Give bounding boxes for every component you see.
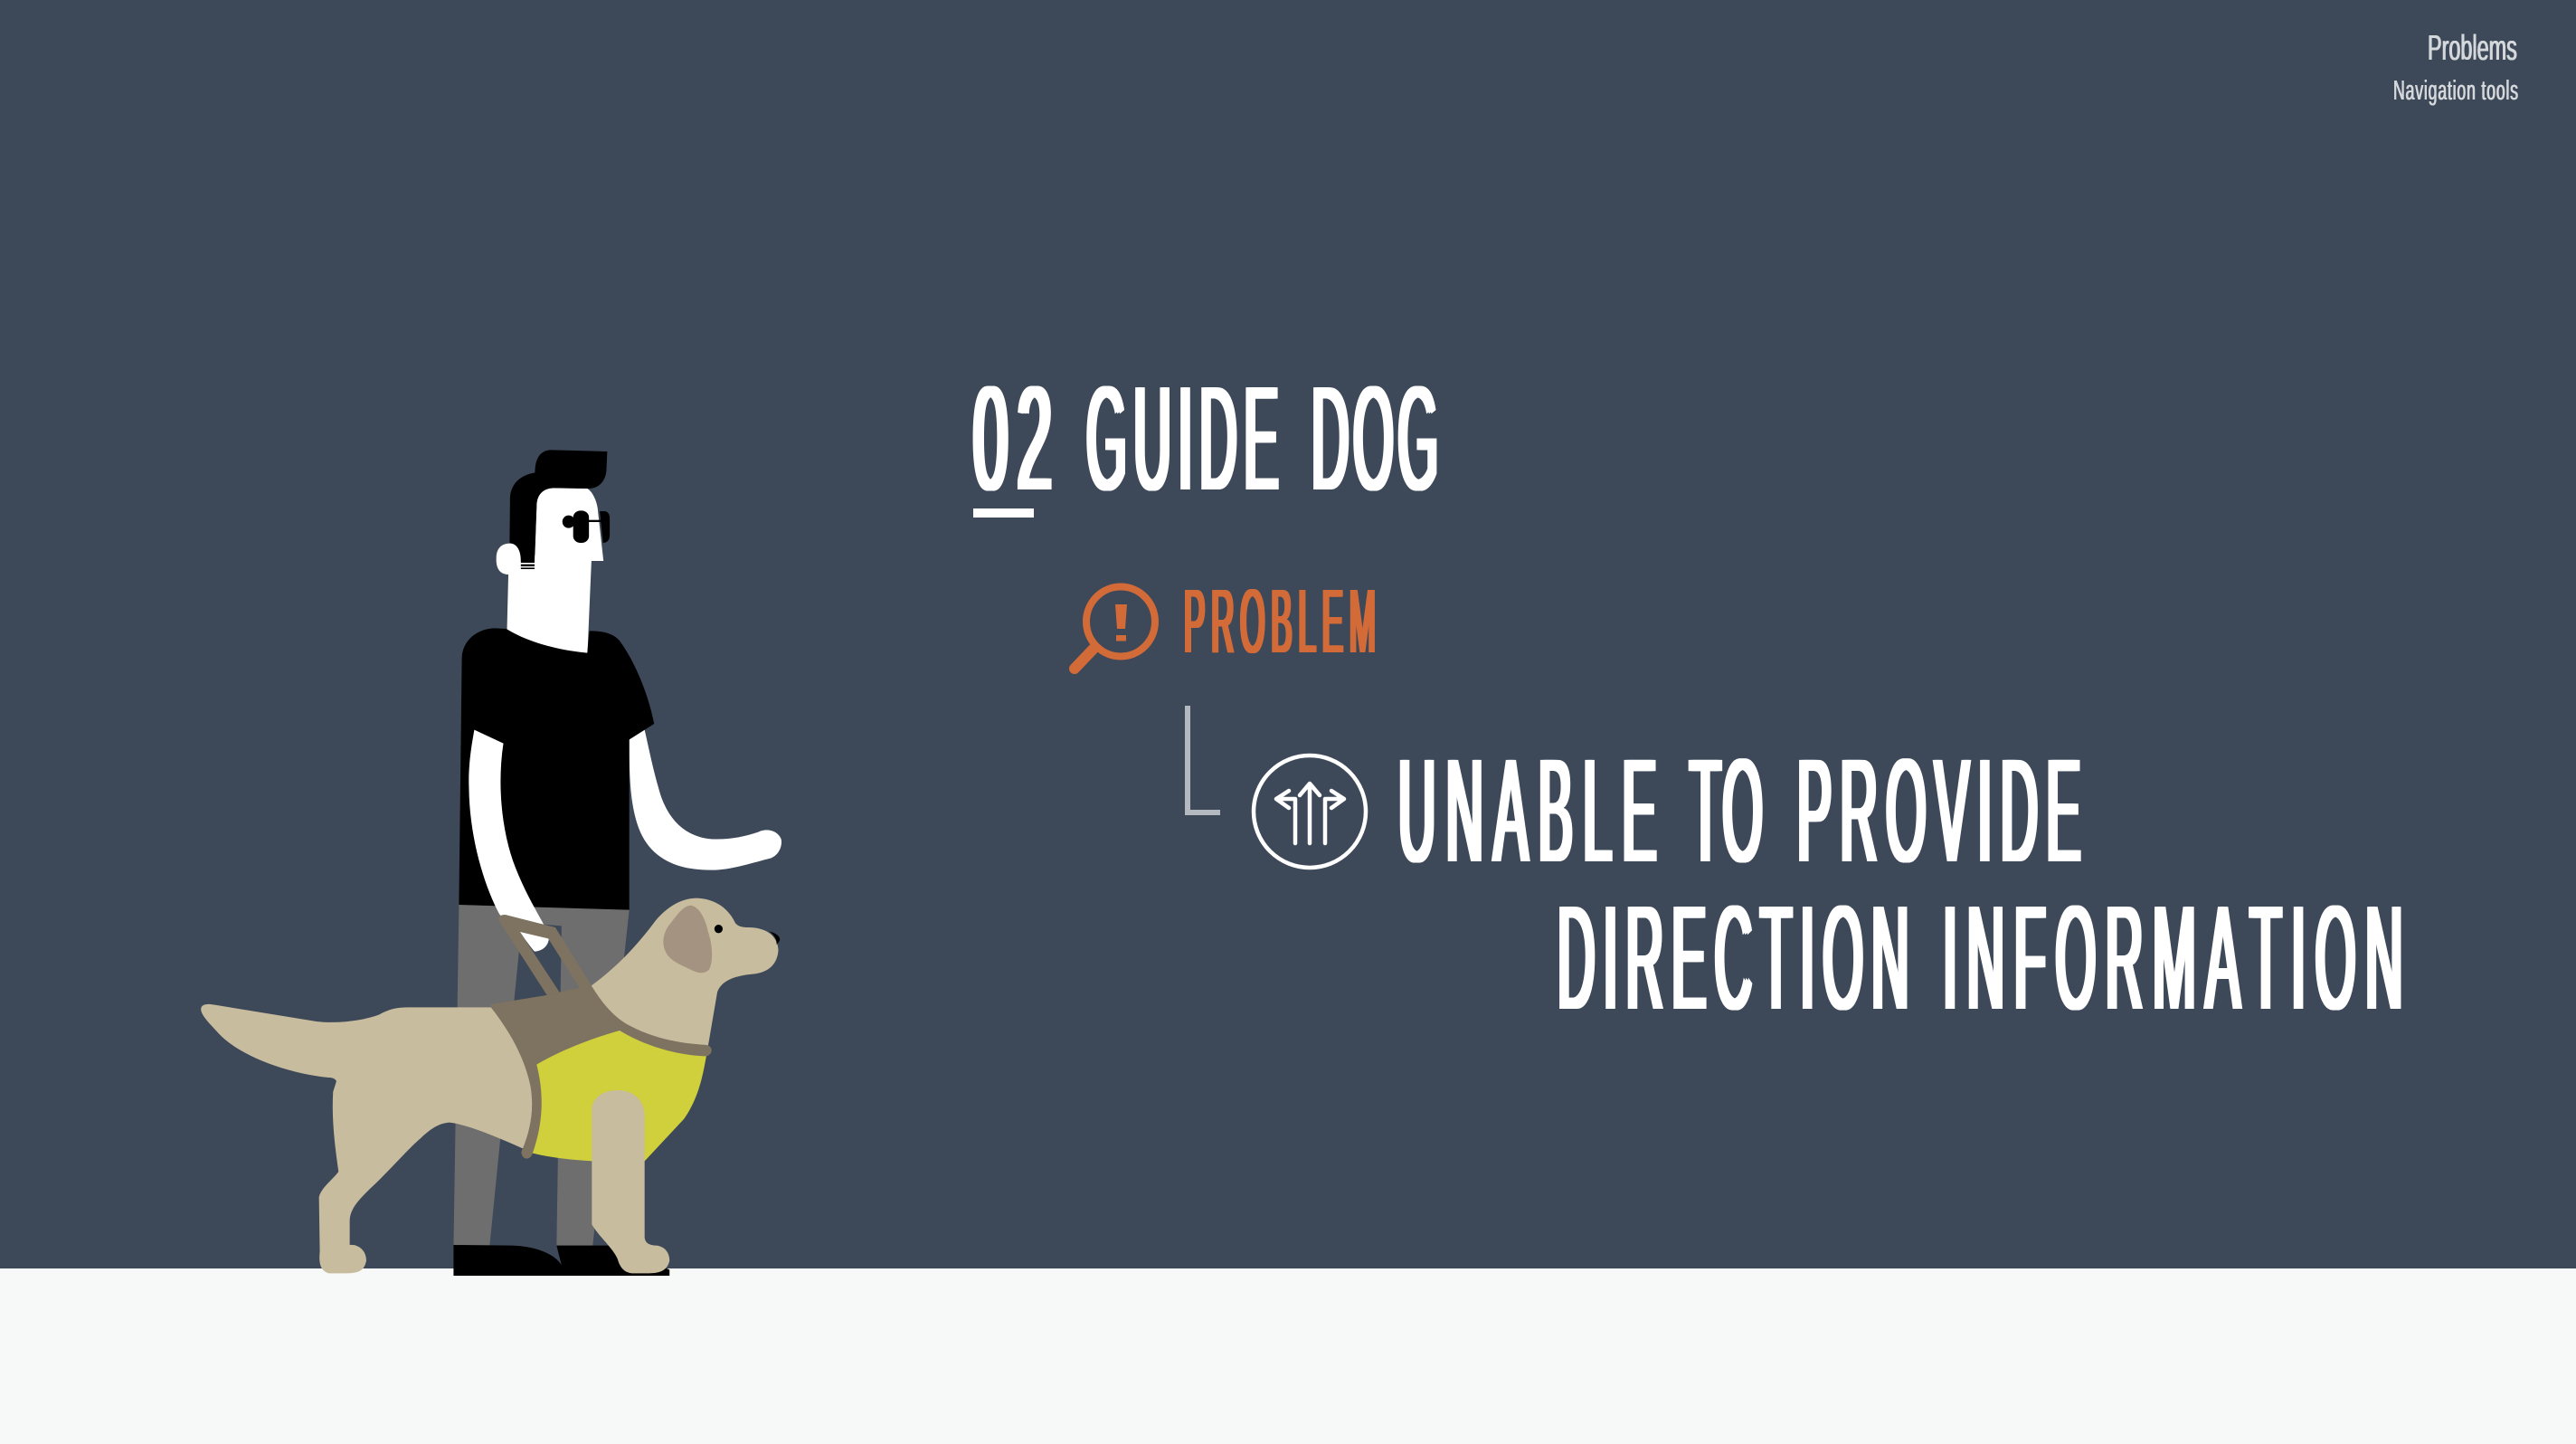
man: shoes <box>453 1245 669 1276</box>
statement line 1: TO <box>1690 727 1765 893</box>
man: sunglasses <box>563 510 610 543</box>
statement line 1: PROVIDE <box>1797 727 2089 893</box>
man: near arm <box>469 730 549 952</box>
dog: eye <box>715 925 723 933</box>
man: far arm <box>630 730 781 870</box>
dog: nose <box>769 931 780 945</box>
statement line 2 <box>1558 875 2412 1040</box>
illustration: guide dog with harness <box>201 898 780 1273</box>
man: sideburn <box>521 560 535 569</box>
man: hair <box>509 450 607 561</box>
breadcrumb: Navigation tools: Navigation tools <box>2393 75 2519 106</box>
statement line 1: UNABLE <box>1398 727 1667 893</box>
icon: three direction arrows in a circle <box>1254 755 1366 868</box>
title: 02 <box>973 356 1061 521</box>
dog: front leg <box>592 1090 669 1273</box>
man: t-shirt <box>459 628 654 910</box>
man: neck and face <box>497 488 603 658</box>
dog: ear <box>663 906 712 973</box>
ground band <box>0 1268 2576 1444</box>
title underline <box>973 508 1034 518</box>
illustration: man in black t-shirt with glasses <box>453 450 781 1276</box>
dog: harness saddle and straps <box>491 988 712 1159</box>
heading: problem: PROBLEM <box>1184 571 1381 672</box>
title <box>973 356 1443 521</box>
breadcrumb: Problems: Problems <box>2428 29 2517 68</box>
dog: head and neck <box>591 898 779 1048</box>
dog: body, tail and hind leg <box>201 1004 536 1273</box>
title: GUIDE <box>1086 356 1285 521</box>
statement line 1 <box>1398 727 2089 893</box>
title: DOG <box>1312 356 1443 521</box>
man: trousers <box>453 905 630 1246</box>
statement line 2: DIRECTION <box>1558 875 1918 1040</box>
connector line <box>1188 706 1220 812</box>
dog: harness handle <box>498 915 592 995</box>
statement line 2: INFORMATION <box>1943 875 2412 1040</box>
icon: magnifier with exclamation mark <box>1075 586 1155 669</box>
dog: yellow vest <box>530 1029 707 1162</box>
